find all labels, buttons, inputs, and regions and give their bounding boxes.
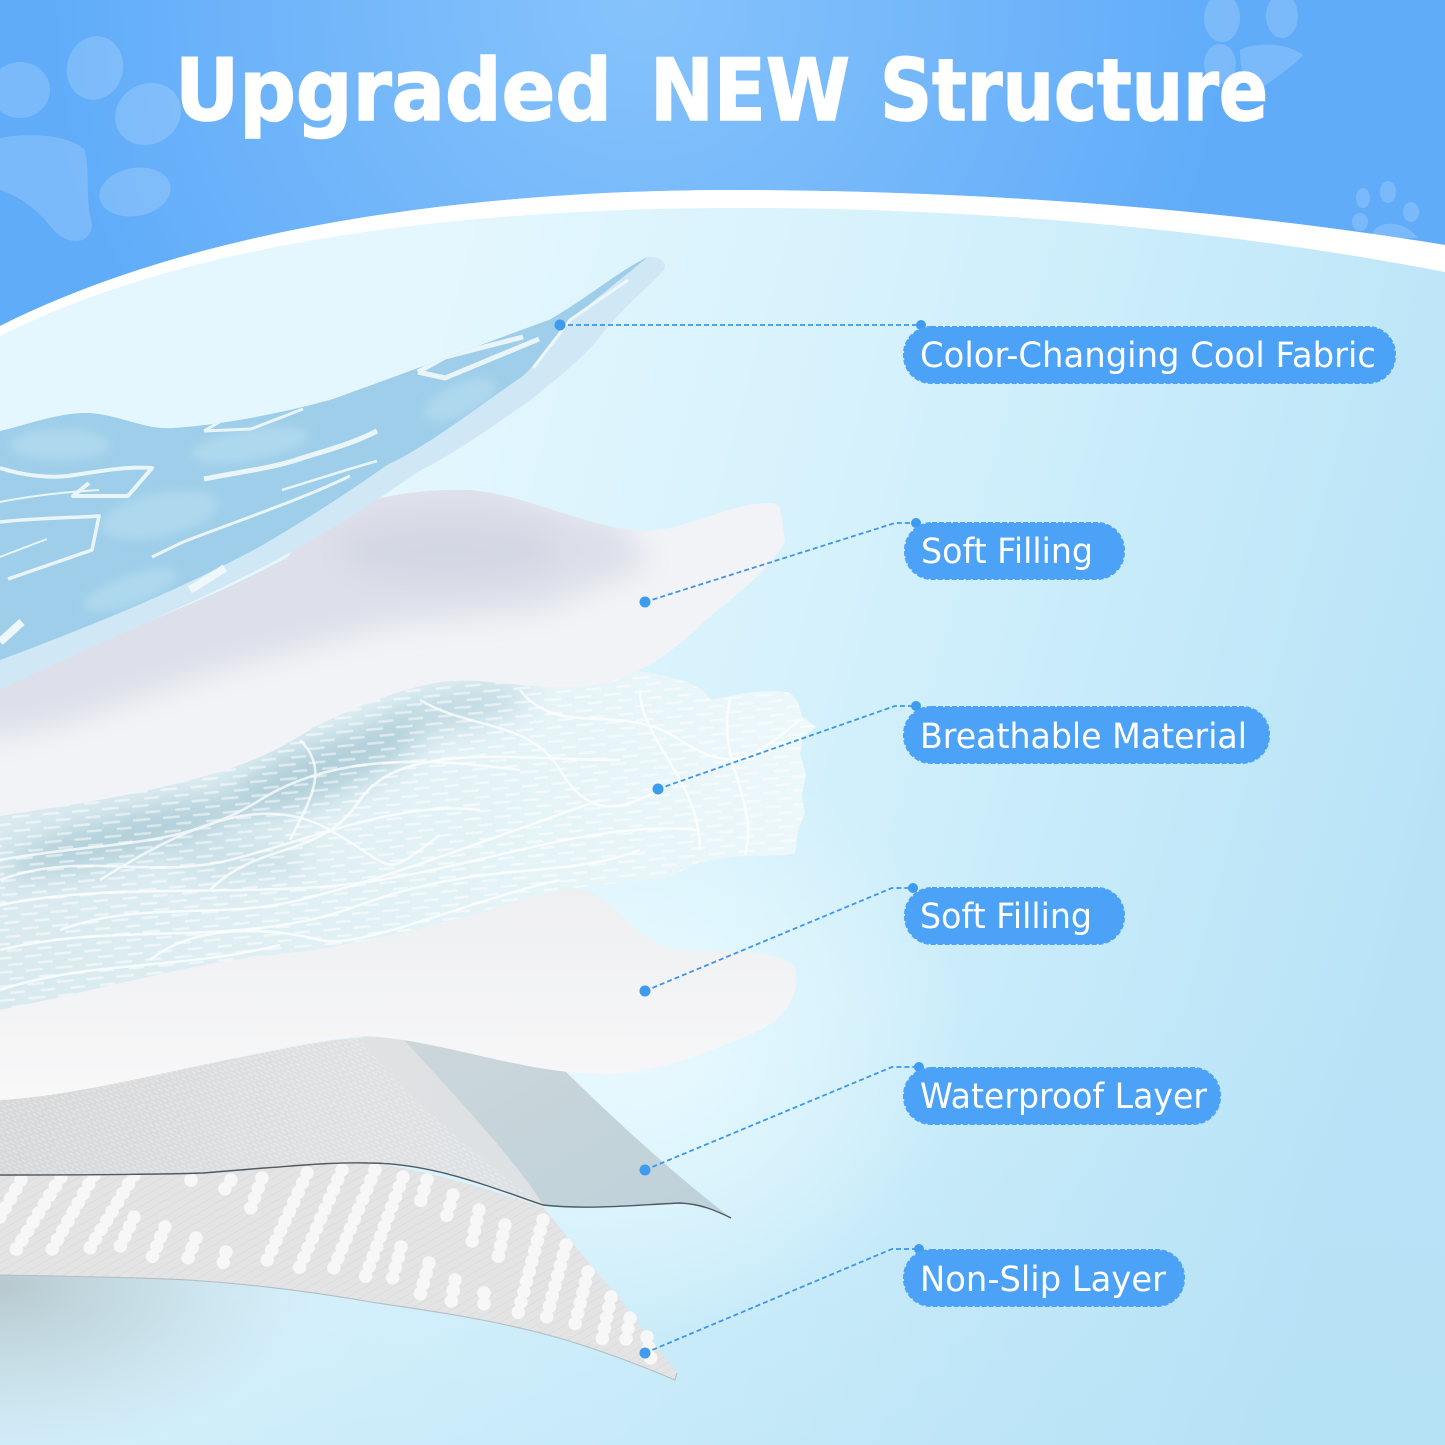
callout: soft filling lower: Soft Filling bbox=[920, 897, 1092, 937]
callout: waterproof layer: Waterproof Layer bbox=[920, 1077, 1208, 1117]
layer: lower foam bbox=[0, 887, 796, 1100]
layer: upper foam bbox=[0, 470, 800, 820]
title: Upgraded bbox=[175, 41, 612, 141]
callout: color-changing cool fabric: Color-Changing Cool Fabric bbox=[920, 336, 1376, 376]
title: Structure bbox=[880, 41, 1268, 141]
paw prints bbox=[0, 0, 1419, 241]
callout: soft filling bbox=[640, 518, 1124, 608]
callout: soft filling: Soft Filling bbox=[921, 532, 1093, 572]
title bbox=[175, 41, 1268, 141]
callout: color-changing cool fabric bbox=[554, 320, 1395, 383]
layer: breathable mesh bbox=[0, 650, 830, 1020]
callout: breathable material: Breathable Material bbox=[920, 717, 1247, 757]
callout: breathable material bbox=[652, 701, 1269, 794]
callout: non-slip layer bbox=[640, 1244, 1184, 1358]
callout: non-slip layer: Non-Slip Layer bbox=[920, 1260, 1167, 1300]
callout: waterproof layer bbox=[640, 1062, 1220, 1176]
title: NEW bbox=[650, 41, 850, 141]
layer: waterproof bbox=[0, 1030, 731, 1218]
header band bbox=[0, 0, 1445, 336]
layer: non-slip bbox=[0, 1163, 677, 1380]
layer: color-changing fabric bbox=[0, 250, 670, 690]
callout: soft filling lower bbox=[640, 883, 1124, 996]
